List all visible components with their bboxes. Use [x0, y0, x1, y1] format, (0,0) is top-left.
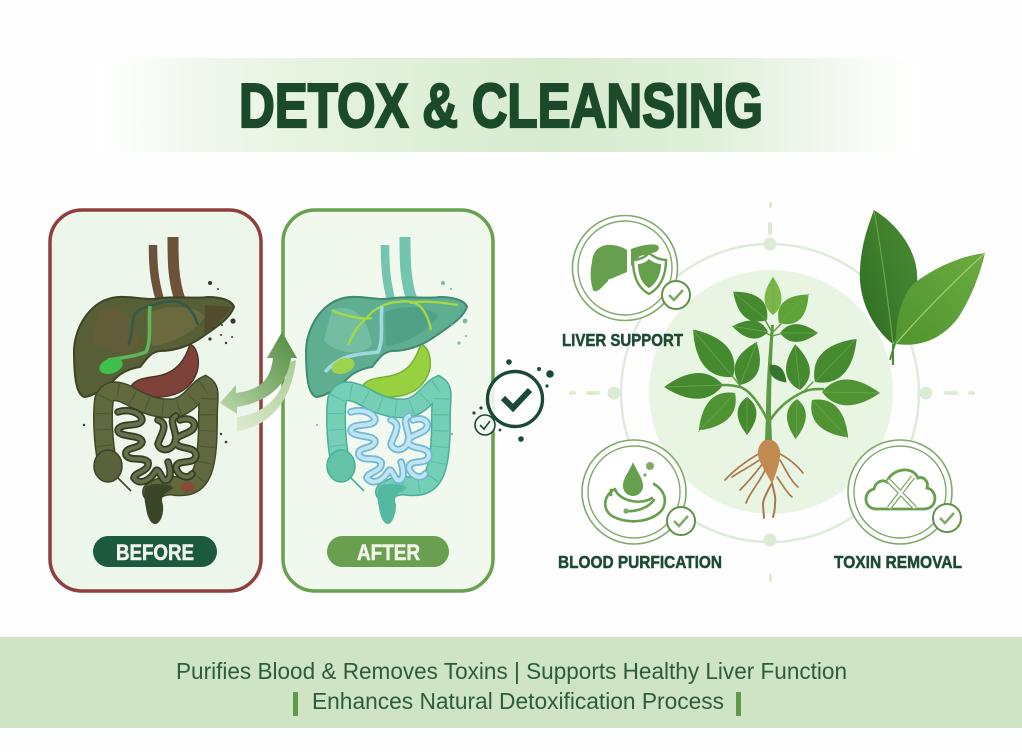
- appendix: [351, 478, 364, 491]
- blood icon ring: [582, 440, 686, 544]
- back leaf midrib: [874, 210, 893, 344]
- before label: [93, 536, 217, 567]
- back leaf: [860, 210, 917, 344]
- liver notch: [608, 278, 616, 284]
- stomach: [361, 344, 430, 397]
- toxin specks: [83, 281, 236, 443]
- large check mark: [503, 390, 530, 408]
- root body: [758, 439, 780, 484]
- icon: shield: [633, 253, 666, 294]
- small check ring: [475, 415, 495, 435]
- panel: before: [50, 210, 261, 591]
- cecum: [94, 450, 122, 482]
- small intestine highlight: [118, 411, 196, 482]
- leaf stem: [890, 340, 896, 365]
- liver: [74, 297, 234, 397]
- footer line 2: Enhances Natural Detoxification Process: [312, 688, 724, 714]
- small intestine highlight: [351, 411, 429, 482]
- footer line 1: Purifies Blood & Removes Toxins | Supports Healthy Liver Function: [176, 658, 847, 684]
- diagram: herbal benefits: [558, 202, 985, 582]
- after label: [327, 536, 449, 567]
- central disc: [649, 270, 893, 514]
- main stem: [765, 325, 774, 440]
- leaf midribs: [665, 277, 880, 439]
- after pill: [327, 536, 449, 567]
- benefit: liver support: [562, 216, 690, 350]
- small check mark: [480, 421, 490, 429]
- stems: [723, 320, 823, 419]
- arrow: back to before: [220, 332, 297, 414]
- plant leaves: [664, 277, 880, 446]
- big leaves: [860, 210, 985, 365]
- gallbladder: [97, 355, 125, 377]
- arrow: lower sweep: [237, 360, 296, 431]
- icon: check badge with dots: [472, 359, 554, 442]
- label: liver support: LIVER SUPPORT: [562, 330, 683, 350]
- icon: droplet: [623, 462, 643, 496]
- cecum: [327, 450, 355, 482]
- check badge: [662, 281, 690, 309]
- check badge: [667, 507, 695, 535]
- rectum: [144, 484, 174, 524]
- appendix: [118, 478, 131, 491]
- gallbladder: [329, 355, 357, 377]
- toxin icon ring: [848, 440, 952, 544]
- check badge: [933, 504, 961, 532]
- footer band: [0, 637, 1022, 728]
- liver shading: [324, 307, 438, 352]
- liver shading: [92, 305, 232, 352]
- label: toxin removal: TOXIN REMOVAL: [834, 552, 962, 572]
- icon: liver: [591, 244, 659, 291]
- colon: [103, 386, 209, 492]
- dots: [472, 359, 554, 442]
- panel frame: after: [283, 210, 493, 591]
- stomach: [130, 344, 198, 397]
- benefit: blood purification: [558, 440, 722, 572]
- label: blood purification: BLOOD PURFICATION: [558, 552, 722, 572]
- healthy specks: [316, 281, 467, 435]
- liver veins: [332, 301, 458, 345]
- panel frame: before: [50, 210, 261, 591]
- title band: [100, 58, 920, 152]
- roots: [725, 453, 803, 518]
- title: DETOX & CLEANSING: [239, 72, 763, 141]
- front leaf: [896, 253, 985, 345]
- benefit: toxin removal: [834, 440, 962, 572]
- before text: BEFORE: [116, 540, 194, 565]
- small intestine: [351, 411, 429, 482]
- vessels: [385, 237, 412, 300]
- icon: swirl: [605, 484, 665, 521]
- large check ring: [488, 372, 542, 426]
- illustration: unhealthy organs: [74, 237, 236, 524]
- small intestine: [118, 411, 196, 482]
- colon: [336, 386, 442, 492]
- inflamed spot: [181, 482, 195, 492]
- vessels: [153, 237, 180, 300]
- after text: AFTER: [357, 540, 420, 565]
- liver support icon ring: [572, 216, 678, 320]
- panel: after: [283, 210, 493, 591]
- before pill: [93, 536, 217, 567]
- outer ring: [621, 244, 919, 542]
- icon: cross: [888, 477, 915, 508]
- arrows: before to after: [220, 332, 297, 431]
- ring nodes: [569, 202, 975, 582]
- bile duct: [325, 306, 382, 372]
- plant: [664, 277, 880, 518]
- small dots: [623, 462, 654, 514]
- icon: cloud: [866, 470, 935, 509]
- liver veins: [128, 301, 198, 345]
- footer text: [176, 658, 847, 716]
- front leaf midrib: [893, 253, 985, 347]
- rectum: [377, 484, 407, 524]
- liver: [306, 297, 467, 397]
- bile duct: [108, 306, 150, 360]
- illustration: healthy organs: [306, 237, 467, 524]
- footer bars: [293, 692, 741, 716]
